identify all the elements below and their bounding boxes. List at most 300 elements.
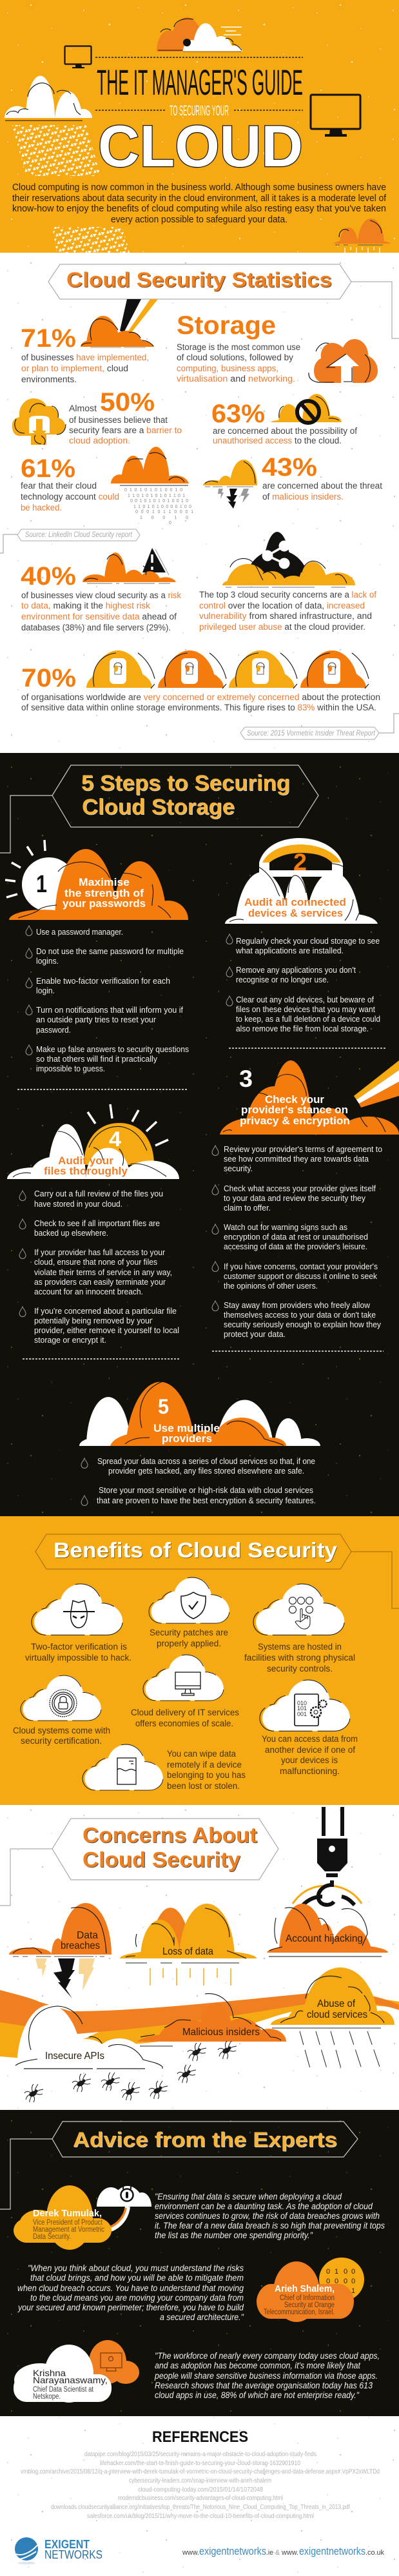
concern: account hijacking	[267, 1807, 388, 1956]
stat: 61%: technology account could	[21, 492, 119, 502]
stat: 50%: of businesses believe that	[69, 415, 168, 425]
benefit: physical security: facilities with strong physical	[244, 1653, 355, 1663]
expert: arieh shalem: 0	[344, 2268, 347, 2276]
quote: arieh: that cloud brings, and how you will be able to mitigate them	[30, 2273, 244, 2283]
heading: benefits of cloud security: Benefits of Cloud Security	[54, 1539, 338, 1563]
expert: derek tumulak: Data Security.	[33, 2233, 71, 2241]
stat: 40%	[21, 548, 181, 632]
icon: step 2 cloud: 2	[293, 849, 307, 875]
bullets: step 3: themselves access to your data or don't take	[224, 1310, 376, 1320]
source: linkedin: Source: LinkedIn Cloud Security report	[25, 531, 133, 539]
quote: derek: the list as the number one spending priority."	[155, 2230, 313, 2240]
stat: 50%: cloud adoption.	[69, 436, 130, 445]
expert: arieh shalem: 1	[335, 2268, 338, 2276]
quote: krishna: people will share sensitive business information via those apps.	[154, 2371, 378, 2381]
quote: arieh: when cloud breach occurs. You have to understand that moving	[17, 2283, 244, 2293]
website links: .ie	[266, 2549, 273, 2557]
website links: www.	[281, 2549, 298, 2557]
icon: step 2 cloud: Audit all connected	[244, 896, 346, 908]
benefit: remote wipe: been lost or stolen.	[167, 1781, 240, 1791]
benefit: two-factor verification: virtually impossible to hack.	[25, 1653, 131, 1663]
expert: arieh shalem: 0	[351, 2268, 355, 2276]
reference list: salesforce.com/uk/blog/2015/11/why-move-to-the-cloud-10-benefits-of-cloud-computing.html	[87, 2512, 314, 2520]
stat: storage	[177, 311, 378, 384]
icon: hacker hat	[63, 1601, 95, 1628]
icon: step 3 cloud: Check your	[265, 1093, 324, 1106]
concern: malicious insiders: Malicious insiders	[182, 2027, 260, 2038]
heading: cloud security statistics	[48, 264, 351, 299]
bullets: step 1: login.	[36, 986, 55, 995]
expert: arieh shalem: Chief of Information	[280, 2294, 335, 2302]
stat: 40%: environment for sensitive data ahead of	[21, 612, 177, 621]
quote: arieh: a secured architecture."	[160, 2312, 244, 2322]
icon: step 3 cloud	[220, 1060, 399, 1135]
source: vormetric: Source: 2015 Vormetric Insider Threat Report	[247, 730, 376, 737]
quote: derek: environment can be a daunting task. As the adoption of cloud	[155, 2201, 373, 2211]
concern: account hijacking: Account hijacking	[286, 1933, 363, 1944]
reference list: datapipe.com/blog/2015/03/25/security-remains-a-major-obstacle-to-cloud-adoption-study-finds	[84, 2450, 316, 2458]
bullets: step 5	[81, 1456, 316, 1506]
quote: derek: "Ensuring that data is secure when deploying a cloud	[155, 2192, 342, 2201]
stat: top 3 concerns	[199, 532, 376, 632]
stat: top 3 concerns: privileged user abuse at the cloud provider.	[199, 622, 365, 632]
heading: 5 steps: Cloud Storage	[82, 795, 235, 819]
bullets: step 3: security seriously enough to explain how they	[224, 1320, 381, 1329]
expert: arieh shalem: 0	[335, 2278, 338, 2285]
icon: spiders	[24, 2041, 237, 2102]
step 2	[225, 838, 387, 1048]
benefit: security certification: Cloud systems come with	[13, 1726, 110, 1735]
website links: www.	[182, 2549, 199, 2557]
heading: concerns about cloud security: Cloud Security	[83, 1848, 242, 1872]
quote: derek: services continues to grow, the risk of data breaches grows with	[155, 2211, 380, 2221]
expert: arieh shalem: 0	[326, 2278, 330, 2285]
benefit: remote access: malfunctioning.	[280, 1766, 340, 1776]
stat: 40%: 40%	[21, 562, 76, 590]
icon: step 5 cloud	[79, 1380, 320, 1446]
expert: derek tumulak	[14, 2179, 385, 2250]
panel: statistics background	[0, 253, 399, 753]
panel: steps background	[0, 753, 399, 1516]
stat: 63%: are concerned about the possibility of	[213, 426, 357, 436]
icon: lock clouds	[86, 650, 369, 688]
concern: loss of data: Loss of data	[162, 1946, 213, 1957]
bullets: step 2: files on these devices that you may want	[236, 1004, 375, 1014]
heading: advice from the experts	[0, 2122, 358, 2209]
stat: 40%: of businesses view cloud security as a risk	[21, 590, 181, 600]
binary rain	[124, 488, 193, 525]
heading: 5 steps: 5 Steps to Securing	[82, 772, 291, 796]
intro text: their reservations about data security in the cloud environment, all it takes is a moderate level of	[12, 193, 387, 204]
heading: benefits of cloud security	[35, 1534, 399, 1608]
bullets: step 2: what applications are installed.	[235, 946, 344, 955]
bullets: step 3	[212, 1144, 382, 1339]
source: linkedin	[0, 529, 140, 553]
concern: data breaches	[9, 1903, 112, 1998]
icon: cloud upload	[309, 339, 378, 383]
bullets: step 1: Do not use the same password for multiple	[36, 946, 184, 956]
stat: 43%: 43%	[262, 453, 317, 482]
source: vormetric	[240, 714, 399, 739]
icon: tablet and gears: 010	[297, 1700, 307, 1706]
bullets: step 3: Stay away from providers who freely allow	[224, 1300, 371, 1310]
expert: arieh shalem: 0	[351, 2278, 355, 2285]
logo: exigent networks: NETWORKS	[44, 2548, 102, 2561]
concern: loss of data	[120, 1904, 257, 1986]
bullets: step 1: logins.	[36, 956, 59, 966]
icon: step 2 cloud: devices & services	[248, 907, 343, 919]
icon: rain of white arrows	[12, 125, 101, 176]
stat: 40%: databases (38%) and file servers (29%).	[21, 623, 171, 632]
benefit: two-factor verification	[25, 1584, 131, 1663]
bullets: step 4: account for an innocent breach.	[34, 1287, 143, 1296]
quote: krishna: "The workforce of nearly every company today uses cloud apps,	[155, 2351, 380, 2361]
bullets: step 3: customer support or discuss it online to seek	[224, 1271, 377, 1281]
icon: lower right cloud	[333, 219, 391, 253]
step 1	[5, 840, 189, 1089]
bullets: step 3: security.	[224, 1164, 253, 1173]
heading: benefits of cloud security: Benefits of Cloud Security	[54, 1538, 338, 1562]
website links: &	[275, 2549, 280, 2557]
binary rain: 1 1 0 1 0 1 0 0 0 0 1 0 0	[133, 505, 191, 509]
step 3	[212, 1060, 399, 1351]
bullets: step 5: Store your most sensitive or high-risk data with cloud services	[99, 1485, 313, 1495]
stat: 70%: of organisations worldwide are very concerned or extremely concerned about the protection	[21, 692, 380, 702]
panel: advice background	[0, 2110, 399, 2416]
heading: concerns about cloud security	[0, 1819, 278, 1906]
bullets: step 1: Turn on notifications that will inform you if	[36, 1005, 183, 1015]
bullets: step 2: Regularly check your cloud storage to see	[236, 936, 380, 946]
bullets: step 3: to your data and review the security they	[224, 1193, 365, 1203]
benefit: security patches: Security patches are	[150, 1628, 228, 1637]
connector: stats right	[351, 282, 399, 338]
step 5	[79, 1380, 320, 1506]
stat: 43%	[203, 453, 382, 509]
panel: header background	[0, 0, 399, 253]
heading: 5 steps: 5 Steps to Securing	[81, 771, 290, 795]
stat: top 3 concerns: control over the location of data, increased	[199, 601, 365, 610]
bullets: step 4: Check to see if all important files are	[34, 1218, 160, 1228]
bullets: step 3: If you have concerns, contact your provider's	[224, 1262, 378, 1271]
stat: 71%: environments.	[21, 375, 77, 384]
bullets: step 2	[226, 934, 380, 1033]
expert: derek tumulak: Derek Tumulak,	[33, 2208, 102, 2219]
stat: 50%	[12, 388, 182, 445]
icon: cloud download	[12, 398, 66, 445]
panel: footer background	[0, 2416, 399, 2576]
stat: 43%: of malicious insiders.	[262, 492, 344, 502]
benefit: two-factor verification: Two-factor verification is	[31, 1642, 127, 1652]
quote: arieh: your secured and known perimeter; therefore, you have to build	[17, 2303, 244, 2312]
icon: tablet and gears	[295, 1694, 326, 1726]
benefit: remote wipe: You can wipe data	[167, 1749, 236, 1759]
benefit: economies of scale: Cloud delivery of IT services	[131, 1708, 239, 1717]
intro text: Cloud computing is now common in the business world. Although some business owners have	[12, 182, 386, 193]
website links: .co.uk	[365, 2549, 384, 2557]
benefit: remote wipe: belonging to you has	[167, 1770, 246, 1780]
icon: step 4 cloud: 4	[109, 1127, 121, 1151]
stat: storage: virtualisation and networking.	[177, 374, 295, 384]
heading: concerns about cloud security: Concerns About	[83, 1823, 257, 1847]
icon: tablet and gears: 101	[297, 1705, 307, 1712]
quote: krishna	[154, 2351, 380, 2400]
bullets: step 1: Make up false answers to security questions	[36, 1044, 189, 1054]
intro text: know-how to enjoy the benefits of cloud computing while also resting easy that you've taken	[12, 204, 386, 214]
binary rain: 0 0 1 0 1 0 1 0 1 0 0 1 0	[130, 499, 188, 503]
website links: exigentnetworks	[199, 2545, 266, 2557]
benefit: remote access: another device if one of	[265, 1745, 355, 1755]
expert: arieh shalem: Telecommunication, Israel.	[264, 2308, 335, 2316]
expert: krishna narayanaswamy: Krishna	[33, 2368, 66, 2378]
expert: arieh shalem: 1	[344, 2287, 347, 2295]
icon: lock seal	[50, 1690, 77, 1717]
benefit: remote wipe: remotely if a device	[167, 1760, 242, 1770]
bullets: step 1: Enable two-factor verification for each	[36, 976, 170, 986]
bullets: step 3: see how committed they are towards data	[224, 1154, 369, 1164]
benefit: physical security: security controls.	[267, 1664, 333, 1673]
heading: cloud security statistics: Cloud Security Statistics	[67, 269, 333, 292]
expert: krishna narayanaswamy: Netskope.	[33, 2393, 61, 2401]
bullets: step 5: Spread your data across a series of cloud services so that, if one	[97, 1456, 315, 1466]
step 4	[7, 1104, 180, 1359]
bullets: step 4: If your provider has full access to your	[34, 1247, 166, 1257]
reference list: cloud-computing-today.com/2015/01/14/1072048	[138, 2486, 263, 2493]
panel: header	[5, 17, 391, 253]
icon: step 2 cloud	[225, 838, 378, 924]
heading: 5 steps	[0, 765, 318, 853]
benefit: security patches	[149, 1577, 229, 1648]
icon: step 1 cloud: 1	[36, 871, 47, 898]
stat: storage: of cloud solutions, followed by	[177, 353, 293, 362]
title: cloud: CLOUD	[98, 114, 303, 179]
quote: arieh: to the cloud means you are moving your company data from	[30, 2293, 244, 2303]
bullets: step 3: claim to offer.	[224, 1203, 271, 1213]
stat: 70%	[21, 650, 380, 712]
bullets: step 1: Use a password manager.	[36, 927, 123, 937]
bullets: step 4: as providers can easily terminate your	[34, 1277, 166, 1287]
icon: small monitor	[64, 46, 92, 68]
reference list	[21, 2450, 380, 2520]
heading: advice from the experts: Advice from the Experts	[73, 2128, 337, 2151]
icon: keypad hand	[289, 1597, 313, 1629]
icon: tablet and gears: 001	[297, 1711, 307, 1717]
concern: insecure apis: Insecure APIs	[45, 2051, 104, 2062]
bullets: step 4: storage or encrypt it.	[34, 1335, 106, 1345]
icon: monitor	[101, 2353, 122, 2371]
icon: step 4 cloud: files thoroughly	[44, 1165, 128, 1177]
panel: concerns background	[0, 1805, 399, 2110]
bullets: step 3: accessing of data at the provider's leisure.	[224, 1242, 367, 1251]
quote: derek	[155, 2192, 385, 2240]
icon: top clouds	[157, 17, 242, 52]
bullets: step 4	[19, 1189, 179, 1345]
icon: white lock cloud	[97, 2179, 151, 2229]
icon: monitor	[175, 1672, 200, 1695]
expert: arieh shalem: Arieh Shalem,	[275, 2283, 335, 2294]
icon: step 5 cloud: Use multiple	[153, 1422, 220, 1434]
bullets: step 4: Carry out a full review of the files you	[34, 1189, 163, 1198]
expert: krishna narayanaswamy: Chief Data Scientist at	[33, 2386, 94, 2394]
stat: 50%: Almost	[69, 404, 97, 413]
stat: 61%	[21, 447, 193, 525]
bullets: step 4: backed up elsewhere.	[34, 1228, 108, 1238]
benefit: security certification: security certification.	[21, 1736, 102, 1746]
heading: concerns about cloud security: Concerns About	[83, 1824, 258, 1848]
expert: krishna narayanaswamy	[14, 2340, 380, 2403]
stat: 71%: 71%	[21, 324, 76, 353]
icon: step 1 cloud: the strength of	[64, 887, 144, 899]
panel: benefits background	[0, 1516, 399, 1805]
reference list: lifehacker.com/the-start-to-finish-guide-to-securing-your-cloud-storag-1632901910	[100, 2459, 300, 2467]
stat: top 3 concerns: The top 3 cloud security concerns are a lack of	[199, 590, 376, 600]
stat: 71%: or plan to implement, cloud	[21, 364, 128, 373]
benefit: economies of scale	[131, 1655, 239, 1728]
expert: arieh shalem: 0	[326, 2268, 330, 2276]
bullets: step 4: violate their terms of service in any way,	[34, 1267, 172, 1277]
bullets: step 1: so that others will find it practically	[36, 1054, 157, 1064]
heading: advice from the experts: Advice from the Experts	[73, 2129, 338, 2152]
stat: 43%: are concerned about the threat	[262, 481, 382, 491]
stat: 50%: 50%	[100, 388, 155, 416]
benefit: remote access	[260, 1680, 358, 1776]
icon: left white cloud	[5, 76, 92, 121]
icon: step 1 cloud: your passwords	[63, 897, 146, 910]
bullets: step 1	[26, 926, 189, 1073]
stat: storage: Storage is the most common use	[177, 342, 300, 352]
logo: exigent networks	[15, 2537, 102, 2564]
icon: step 3 cloud: 3	[239, 1066, 253, 1092]
concern: abuse of cloud services: cloud services	[307, 2009, 367, 2020]
website links	[182, 2545, 384, 2557]
heading: 5 steps: Cloud Storage	[83, 795, 235, 820]
benefit: security patches: properly applied.	[157, 1639, 221, 1648]
intro text	[12, 182, 387, 225]
intro text: every action possible to safeguard your data.	[111, 215, 287, 225]
heading: references: REFERENCES	[152, 2428, 248, 2446]
bullets: step 1: password.	[36, 1025, 71, 1035]
benefit: security certification	[13, 1675, 110, 1746]
expert: arieh shalem	[17, 2258, 364, 2322]
benefit: economies of scale: offers economies of scale.	[135, 1719, 233, 1728]
concern: data breaches: breaches	[61, 1940, 100, 1951]
quote: krishna: cloud apps in use, 88% of which are not enterprise ready."	[155, 2390, 360, 2400]
icon: rain of white arrows lower	[52, 227, 130, 253]
stat: top 3 concerns: vulnerability from shared infrastructure, and	[199, 611, 372, 621]
stat: 70%: 70%	[21, 664, 76, 692]
icon: large monitor	[311, 95, 360, 137]
reference list: moderndcbusiness.com/security-advantages-of-cloud-computing.html	[118, 2494, 283, 2502]
swoosh bands	[0, 1990, 399, 2060]
icon: step 5 cloud: providers	[162, 1432, 212, 1445]
binary rain: 1 0 0 1 0	[140, 516, 188, 520]
concern: insecure apis	[15, 2005, 163, 2069]
icon: wiped device	[117, 1758, 136, 1784]
bullets: step 5: that are proven to have the best encryption & security features.	[97, 1496, 316, 1505]
stat: storage: computing, business apps,	[177, 364, 278, 373]
binary rain: 0 0 0 1 0 1 1 0 0 0 1	[135, 510, 193, 514]
icon: step 3 cloud: privacy & encryption	[240, 1115, 350, 1127]
stat: 61%: fear that their cloud	[21, 481, 97, 491]
stat: 63%: unauthorised access to the cloud.	[213, 436, 342, 445]
icon: step 1 cloud	[5, 840, 188, 920]
benefit: physical security	[244, 1584, 355, 1673]
bullets: step 4: If you're concerned about a particular file	[34, 1306, 177, 1316]
bullets: step 3: protect your data.	[224, 1329, 286, 1339]
quote: krishna: Research shows that the average organisation today has 613	[155, 2381, 373, 2390]
benefit: remote wipe	[83, 1744, 246, 1791]
benefit: physical security: Systems are hosted in	[258, 1642, 342, 1652]
benefit: remote access: You can access data from	[262, 1734, 358, 1744]
bullets: step 4: cloud, ensure that none of your files	[34, 1257, 157, 1267]
reference list: cybersecurity-leaders.com/snap-interview-with-arieh-shalem	[129, 2477, 271, 2484]
quote: derek: it. The fear of a new data breach is so high that preventing it tops	[155, 2221, 385, 2230]
binary rain: 1 1 0 1 0 1 0 1 0 1 1 0 1	[128, 494, 185, 498]
icon: step 4 cloud: Audit your	[58, 1155, 113, 1167]
quote: arieh: "When you think about cloud, you must understand the risks	[28, 2263, 244, 2273]
bullets: step 3: the opinions of other users.	[224, 1281, 318, 1291]
expert: derek tumulak: Management at Vormetric	[33, 2226, 104, 2234]
bullets: step 1: an outside party tries to reset your	[36, 1015, 157, 1024]
binary rain: 0	[169, 521, 171, 525]
website links: exigentnetworks	[299, 2545, 365, 2557]
stat: 71%: of businesses have implemented,	[21, 353, 149, 362]
bullets: step 3: Review your provider's terms of agreement to	[224, 1144, 382, 1154]
icon: plug and hook	[293, 1807, 362, 1905]
icon: step 1 cloud: Maximise	[79, 876, 130, 888]
concern: abuse of cloud services: Abuse of	[317, 1998, 356, 2009]
bullets: step 5: provider gets hacked, any files stored elsewhere are safe.	[108, 1466, 304, 1476]
icon: step 5 cloud: 5	[158, 1395, 169, 1418]
expert: arieh shalem: 0	[344, 2278, 347, 2285]
concern: abuse of cloud services	[271, 1967, 394, 2071]
stat: 70%: of sensitive data within online storage environments. This figure rises to 83% within the USA.	[21, 703, 376, 712]
stat: 61%: be hacked.	[21, 503, 62, 512]
stat: storage: Storage	[177, 311, 276, 340]
stat: 50%: security fears are a barrier to	[69, 425, 182, 435]
bullets: step 3: Check what access your provider gives itself	[224, 1184, 376, 1193]
expert: derek tumulak: Vice President of Product	[33, 2219, 103, 2227]
icon: step 4 cloud	[7, 1104, 179, 1179]
icon: step 3 cloud: provider's stance on	[241, 1104, 348, 1116]
expert: krishna narayanaswamy: Narayanaswamy,	[33, 2375, 108, 2385]
bullets: step 4: potentially being removed by your	[34, 1316, 153, 1325]
bullets: step 3: Watch out for warning signs such as	[224, 1222, 347, 1232]
heading: concerns about cloud security: Cloud Security	[83, 1848, 241, 1871]
benefit: remote access: your devices is	[281, 1755, 338, 1765]
bullets: step 4: provider, either remove it yourself to local	[34, 1325, 179, 1335]
bullets: step 4: have stored in your cloud.	[34, 1199, 122, 1209]
logo: exigent networks: EXIGENT	[44, 2538, 90, 2551]
stat: 63%: 63%	[211, 400, 265, 428]
divider lines	[95, 57, 303, 110]
stat: 61%: 61%	[21, 454, 75, 483]
stat: 40%: to data, making it the highest risk	[21, 601, 150, 610]
concern: malicious insiders	[137, 1994, 286, 2046]
bullets: step 2: Remove any applications you don't	[236, 965, 356, 975]
concern: data breaches: Data	[77, 1930, 98, 1941]
bullets: step 2: also remove the file from local storage.	[236, 1024, 369, 1033]
stat: 71%	[21, 299, 158, 384]
binary rain: 0 1 0 1 0 1 0 1 0 0 1 0	[124, 488, 182, 493]
expert: arieh shalem: Security at Orange	[284, 2301, 335, 2309]
icon: shield	[181, 1592, 206, 1619]
bullets: step 2: recognise or no longer use.	[236, 975, 329, 984]
heading: cloud security statistics: Cloud Security Statistics	[66, 268, 332, 291]
quote: krishna: and as adoption has become common, it's more likely that	[155, 2361, 361, 2370]
bullets: step 2: to keep, as a full deletion of a device could	[236, 1014, 380, 1024]
bullets: step 2: Clear out any old devices, but beware of	[236, 995, 374, 1004]
panel: header: TO SECURING YOUR	[170, 102, 229, 119]
